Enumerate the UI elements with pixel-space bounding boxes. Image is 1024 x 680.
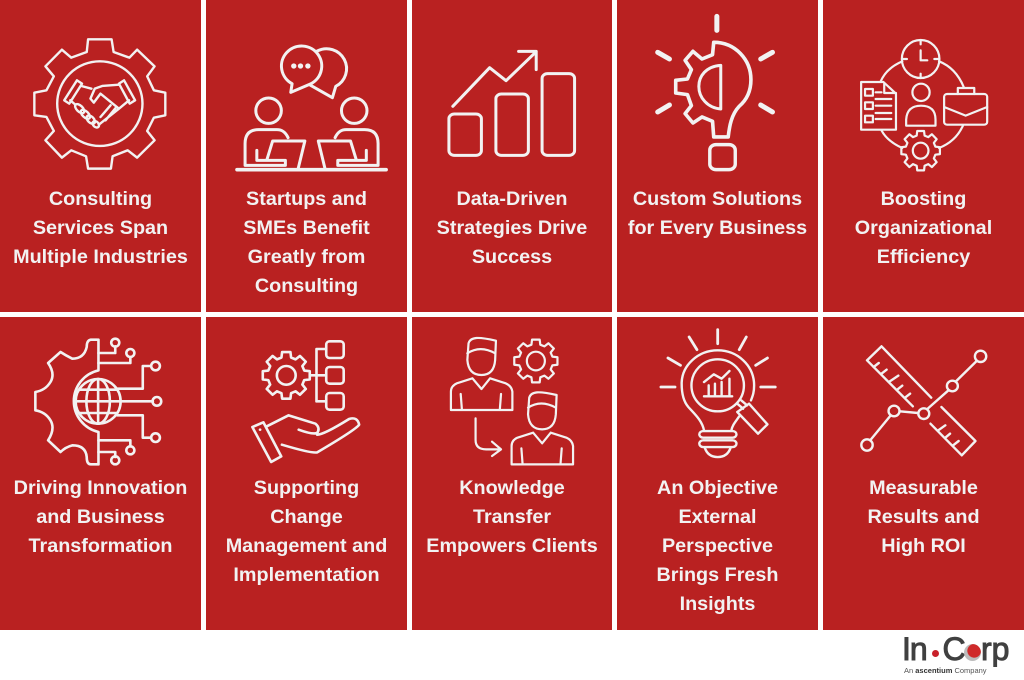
icon: gear light bulb	[655, 14, 775, 172]
panel: measurable results	[823, 317, 1024, 630]
icon: hand holding gear and org chart	[251, 340, 360, 464]
icon: two people with laptops talking	[235, 44, 388, 172]
heading: consulting services: Consulting	[49, 188, 152, 210]
heading: startups: Consulting	[255, 274, 358, 296]
icon: ruler and line chart	[860, 345, 988, 457]
heading: knowledge transfer: Knowledge	[459, 477, 565, 499]
panel: consulting services	[0, 0, 201, 312]
panel: startups and SMEs	[206, 0, 407, 312]
panel: change management	[206, 317, 407, 630]
icon: rising bar chart with arrow	[447, 50, 576, 157]
logo tagline: An ascentium Company	[904, 666, 987, 674]
icon: person with clock, documents, briefcase and gear	[860, 38, 988, 172]
panel: data-driven strategies	[412, 0, 612, 312]
heading: change management: Implementation	[233, 564, 380, 586]
heading: measurable results	[867, 477, 980, 557]
heading: external perspective: External	[678, 506, 757, 528]
logo wordmark: rp	[981, 631, 1009, 667]
heading: data-driven: Success	[472, 246, 552, 268]
logo: InCorp	[902, 631, 1009, 674]
heading: innovation: and Business	[36, 506, 165, 528]
heading: consulting services: Services Span	[33, 216, 168, 238]
icon: handshake in gear	[33, 38, 166, 170]
panel: knowledge transfer	[412, 317, 612, 630]
heading: startups	[243, 188, 370, 296]
heading: efficiency	[855, 188, 992, 268]
logo wordmark: C	[942, 631, 966, 667]
heading: efficiency: Efficiency	[877, 246, 970, 268]
heading: startups: Greatly from	[248, 246, 365, 268]
heading: change management	[226, 477, 387, 586]
heading: startups: SMEs Benefit	[243, 216, 370, 238]
heading: external perspective: Brings Fresh	[656, 564, 778, 586]
heading: data-driven	[437, 188, 587, 268]
icon: light bulb with magnifier	[660, 328, 777, 458]
heading: custom solutions	[628, 188, 807, 238]
heading: efficiency: Organizational	[855, 216, 992, 238]
heading: measurable results: Results and	[867, 506, 980, 528]
icon: digital gear and globe	[34, 337, 162, 466]
heading: external perspective	[656, 477, 778, 615]
heading: external perspective: An Objective	[657, 477, 778, 499]
heading: external perspective: Perspective	[662, 535, 773, 557]
heading: consulting services: Multiple Industries	[13, 246, 188, 268]
heading: consulting services	[13, 188, 188, 268]
heading: innovation: Transformation	[28, 535, 172, 557]
heading: measurable results: Measurable	[869, 477, 978, 499]
logo wordmark	[902, 631, 1009, 667]
heading: measurable results: High ROI	[881, 535, 966, 557]
heading: startups: Startups and	[246, 188, 367, 210]
heading: knowledge transfer: Empowers Clients	[426, 535, 598, 557]
person one	[451, 338, 513, 410]
heading: custom solutions: Custom Solutions	[633, 188, 802, 210]
heading: innovation	[14, 477, 187, 557]
logo wordmark: In	[902, 631, 927, 667]
panel: innovation	[0, 317, 201, 630]
heading: data-driven: Data-Driven	[456, 188, 568, 210]
panel: organizational efficiency	[823, 0, 1024, 312]
person two	[512, 392, 573, 464]
heading: efficiency: Boosting	[881, 188, 966, 210]
heading: innovation: Driving Innovation	[14, 477, 187, 499]
heading: change management: Supporting	[254, 477, 359, 499]
heading: external perspective: Insights	[680, 593, 755, 615]
icon: people sharing knowledge	[450, 336, 574, 466]
panel: custom solutions	[617, 0, 818, 312]
heading: knowledge transfer	[426, 477, 598, 557]
heading: data-driven: Strategies Drive	[437, 216, 587, 238]
panel: external perspective	[617, 317, 818, 630]
heading: change management: Change	[270, 506, 343, 528]
heading: change management: Management and	[226, 535, 387, 557]
heading: custom solutions: for Every Business	[628, 216, 807, 238]
heading: knowledge transfer: Transfer	[473, 506, 551, 528]
